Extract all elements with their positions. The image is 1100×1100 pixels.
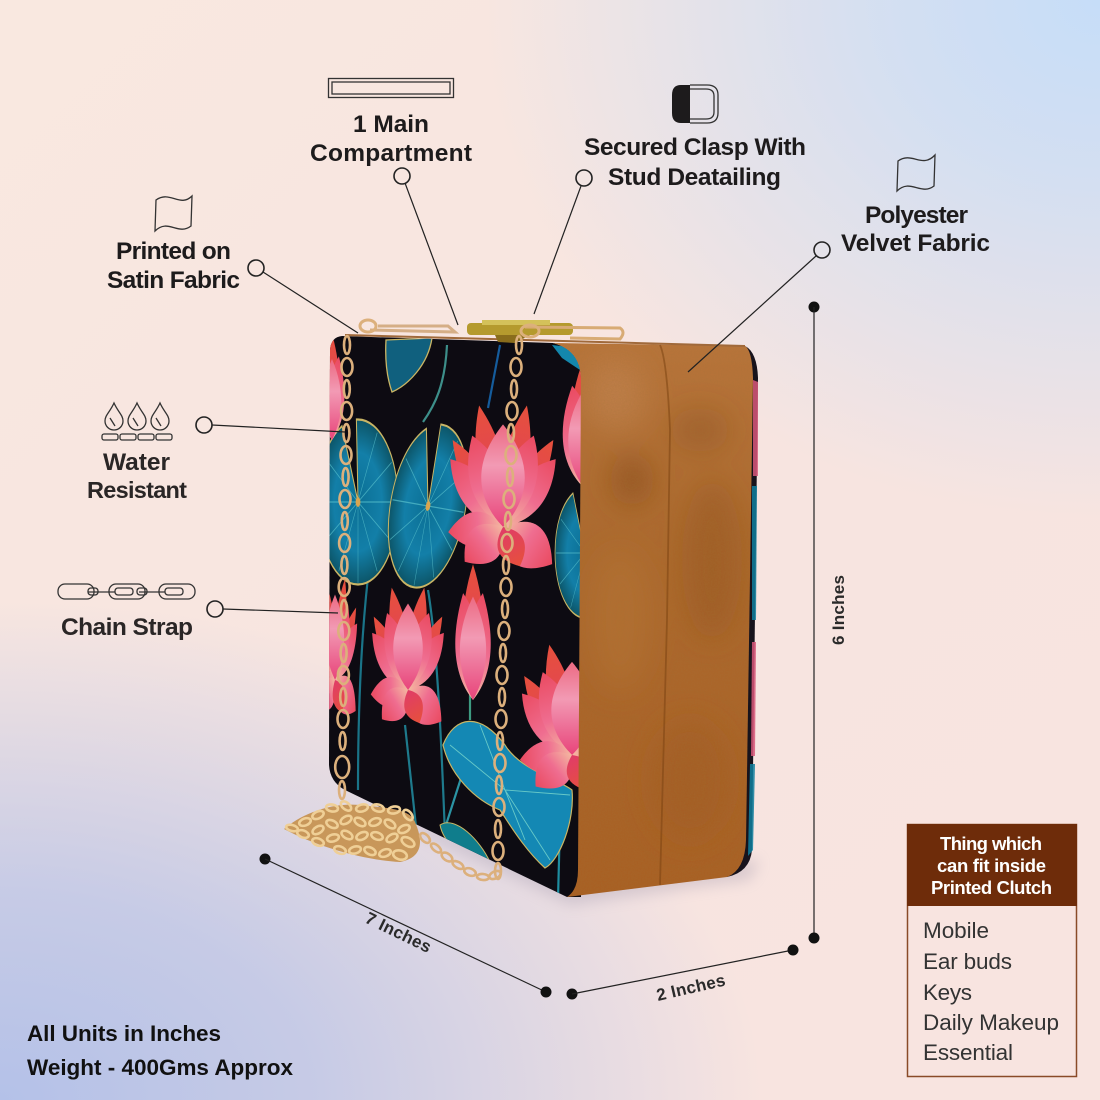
pooled chain [284,799,502,881]
back edge strip of bag [727,346,758,877]
callout: polyester velvet fabric [688,155,990,372]
trailing chain [418,831,502,881]
callout: secured clasp [534,85,806,314]
dimension: depth 2 inches: 2 Inches [655,971,727,1005]
centre chain strap [492,336,522,879]
lotus flowers [448,406,556,568]
callout: 1 main compartment [310,78,472,325]
callout: printed on satin fabric: Satin Fabric [107,267,240,294]
item list: Mobile [923,918,989,943]
callout: secured clasp: Stud Deatailing [608,164,781,191]
callout: water resistant: Resistant [87,477,187,503]
dimension: depth 2 inches [566,944,798,1005]
dimension: height 6 inches [808,302,848,944]
units and weight note [27,1021,293,1080]
velvet side panel [550,340,760,900]
dimension: height 6 inches: 6 Inches [829,575,848,645]
panel heading: can fit inside [937,855,1046,876]
panel heading: Thing which [940,833,1042,854]
velvet seam [660,345,670,885]
panel heading [907,824,1077,906]
item list: Keys [923,980,972,1005]
lily leaves [330,418,396,586]
left chain strap [335,336,352,799]
callout: polyester velvet fabric: Polyester [865,202,968,229]
callout: chain strap: Chain Strap [61,614,193,641]
callout: 1 main compartment: Compartment [310,140,472,167]
floor shadow beneath bag [350,800,760,905]
callout: polyester velvet fabric: Velvet Fabric [841,230,990,257]
dimension: width 7 inches [260,854,552,998]
icon: chain links [58,584,195,599]
callout: chain strap [58,584,338,641]
callout: printed on satin fabric: Printed on [116,238,231,265]
stems [358,345,560,900]
item list: Ear buds [923,949,1012,974]
icon: clasp [672,85,718,123]
gold clasp [360,320,623,343]
callout: 1 main compartment: 1 Main [353,111,429,138]
printed front panel [329,336,581,897]
item list: Essential [923,1040,1013,1065]
item list: Daily Makeup [923,1010,1059,1035]
callout: secured clasp: Secured Clasp With [584,134,806,161]
callout: printed on satin fabric [107,196,358,333]
icon: compartment [328,78,454,98]
top rim [345,335,745,346]
units and weight note: Weight - 400Gms Approx [27,1055,293,1080]
clutch bag product image [284,320,760,900]
icon: water drops [102,403,172,440]
units and weight note: All Units in Inches [27,1021,221,1046]
panel: things which fit inside [907,824,1077,1076]
icon: fabric swatch [155,196,192,231]
dimension: width 7 inches: 7 Inches [362,909,434,957]
panel heading: Printed Clutch [931,877,1052,898]
icon: fabric swatch [897,155,935,191]
velvet mottling [588,366,743,624]
callout: water resistant [87,403,345,503]
callout: water resistant: Water [103,449,170,476]
item list [923,918,1059,1065]
